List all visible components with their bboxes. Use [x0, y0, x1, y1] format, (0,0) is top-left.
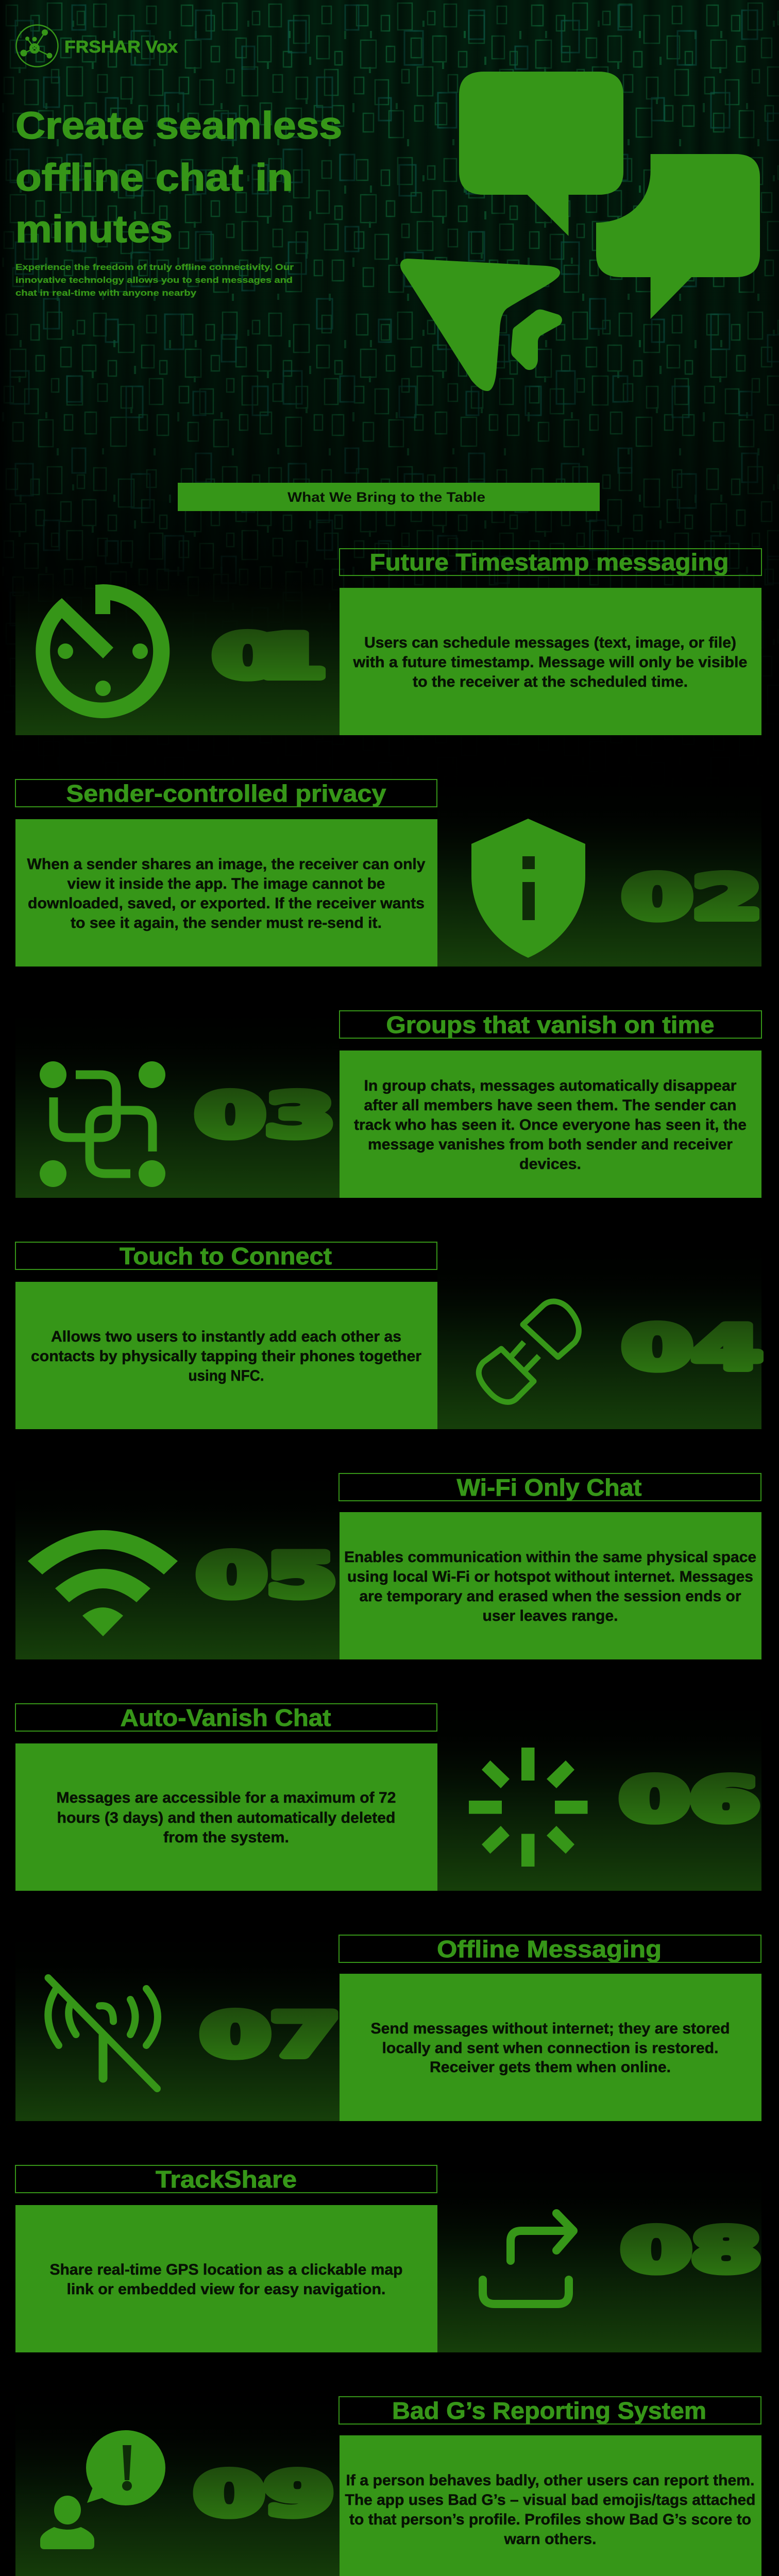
feature 02: sender-controlled privacy — [15, 779, 762, 967]
text panel 05: are temporary and erased when the session ends or — [360, 1588, 741, 1605]
section banner: What We Bring to the Table — [287, 489, 485, 505]
hero paragraph: innovative technology allows you to send messages and — [15, 275, 293, 285]
title box 01: Future Timestamp messaging — [370, 549, 729, 575]
text panel 07: Receiver gets them when online. — [430, 2059, 671, 2076]
feature 07: offline messaging — [15, 1935, 761, 2121]
icon: broken link — [479, 1301, 579, 1402]
icon: no signal — [48, 1978, 158, 2089]
hero heading: Create seamless — [15, 104, 342, 147]
icon: person reporting — [40, 2430, 165, 2549]
logo — [16, 25, 58, 67]
text panel 09: to that person’s profile. Profiles show Bad G’s score to — [349, 2511, 751, 2528]
section banner — [178, 483, 600, 511]
title box 02 — [15, 779, 437, 807]
text panel 07: locally and sent when connection is restored. — [382, 2040, 718, 2057]
brand name: FRSHAR Vox — [64, 37, 178, 56]
text panel 05: using local Wi-Fi or hotspot without internet. Messages — [347, 1568, 753, 1585]
number 07: 07 — [200, 2000, 340, 2070]
title box 08 — [15, 2165, 437, 2193]
text panel 06: from the system. — [163, 1829, 289, 1846]
number 04: 04 — [622, 1313, 762, 1382]
text panel 06 — [15, 1743, 437, 1891]
title box 04 — [15, 1242, 437, 1269]
panel: gradient 04 — [437, 1242, 761, 1429]
text panel 01: Users can schedule messages (text, image, or file) — [364, 634, 736, 651]
hero paragraph: Experience the freedom of truly offline connectivity. Our — [15, 262, 294, 272]
text panel 06: hours (3 days) and then automatically deleted — [57, 1809, 396, 1826]
text panel 08: Share real-time GPS location as a clickable map — [49, 2261, 403, 2278]
title box 07 — [339, 1935, 761, 1962]
text panel 04: contacts by physically tapping their phones together — [31, 1348, 421, 1365]
number 09: 09 — [194, 2459, 334, 2529]
feature 08: trackshare — [15, 2165, 761, 2352]
text panel 03 — [340, 1050, 761, 1198]
text panel 01 — [340, 588, 761, 735]
title box 07: Offline Messaging — [437, 1936, 662, 1962]
title box 04: Touch to Connect — [120, 1243, 332, 1269]
number 02: 02 — [622, 862, 762, 932]
hero paragraph — [15, 262, 294, 298]
title box 09: Bad G’s Reporting System — [392, 2397, 706, 2424]
text panel 08 — [15, 2205, 437, 2352]
hero heading: minutes — [15, 208, 173, 250]
text panel 03: In group chats, messages automatically disappear — [364, 1077, 737, 1094]
panel: gradient 03 — [15, 1011, 340, 1198]
text panel 07 — [340, 1974, 761, 2121]
title box 06 — [15, 1704, 437, 1731]
panel: gradient 02 — [437, 779, 761, 967]
text panel 02 — [15, 819, 437, 967]
text panel 02: view it inside the app. The image cannot be — [67, 875, 385, 892]
text panel 03: devices. — [519, 1156, 581, 1173]
text panel 05: Enables communication within the same physical space — [344, 1549, 756, 1566]
title box 03: Groups that vanish on time — [386, 1011, 714, 1038]
title box 05 — [339, 1473, 761, 1501]
text panel 03: track who has seen it. Once everyone has seen it, the — [354, 1116, 747, 1133]
icon: loading spinner — [469, 1748, 587, 1867]
title box 06: Auto-Vanish Chat — [121, 1704, 331, 1731]
text panel 09: If a person behaves badly, other users can report them. — [346, 2472, 754, 2489]
hero paragraph: chat in real-time with anyone nearby — [15, 288, 197, 298]
text panel 06: Messages are accessible for a maximum of 72 — [57, 1789, 396, 1806]
feature 03: groups that vanish on time — [15, 1011, 761, 1198]
icon: clock — [36, 584, 170, 718]
text panel 04: Allows two users to instantly add each other as — [51, 1328, 401, 1345]
feature 09: bad g's reporting system — [15, 2397, 761, 2576]
text panel 09 — [340, 2435, 761, 2576]
title box 09 — [339, 2397, 761, 2424]
number 06: 06 — [620, 1765, 759, 1834]
text panel 05 — [340, 1512, 761, 1659]
text panel 02: downloaded, saved, or exported. If the receiver wants — [28, 895, 425, 912]
panel: gradient 06 — [437, 1704, 761, 1891]
text panel 01: with a future timestamp. Message will only be visible — [352, 654, 747, 671]
icon: chat bubbles and paper plane — [400, 72, 760, 391]
background: digital rain top — [0, 0, 779, 804]
text panel 09: warn others. — [503, 2531, 597, 2548]
icon: linked group nodes — [40, 1061, 165, 1187]
hero heading: offline chat in — [15, 156, 293, 199]
icon: share arrow — [483, 2213, 573, 2304]
feature 06: auto-vanish chat — [15, 1704, 761, 1891]
panel: gradient 07 — [15, 1935, 340, 2121]
hero heading — [15, 104, 342, 250]
number 03: 03 — [195, 1080, 335, 1150]
number 05: 05 — [197, 1540, 336, 1610]
text panel 05: user leaves range. — [482, 1607, 618, 1624]
text panel 08: link or embedded view for easy navigation. — [67, 2281, 385, 2298]
text panel 03: message vanishes from both sender and receiver — [368, 1136, 733, 1153]
icon: shield — [471, 819, 585, 958]
text panel 04: using NFC. — [189, 1367, 264, 1384]
number 08: 08 — [621, 2215, 761, 2285]
feature 04: touch to connect — [15, 1242, 762, 1429]
panel: gradient 09 — [15, 2397, 340, 2576]
panel: gradient 01 — [15, 548, 340, 735]
number 01: 01 — [213, 621, 327, 691]
title box 02: Sender-controlled privacy — [66, 780, 386, 807]
text panel 09: The app uses Bad G’s – visual bad emojis/tags attached — [345, 2492, 755, 2509]
text panel 02: When a sender shares an image, the receiver can only — [27, 856, 426, 873]
text panel 01: to the receiver at the scheduled time. — [413, 673, 688, 690]
icon: wi-fi — [28, 1530, 178, 1636]
text panel 07: Send messages without internet; they are stored — [371, 2020, 730, 2037]
title box 05: Wi-Fi Only Chat — [456, 1474, 642, 1501]
text panel 03: after all members have seen them. The sender can — [364, 1097, 737, 1114]
title box 08: TrackShare — [156, 2166, 297, 2193]
feature 05: wi-fi only chat — [15, 1473, 761, 1659]
panel: gradient 05 — [15, 1473, 340, 1659]
panel: gradient 08 — [437, 2165, 761, 2352]
text panel 02: to see it again, the sender must re-send it. — [71, 914, 382, 931]
text panel 04 — [15, 1282, 437, 1429]
feature 01: future timestamp messaging — [15, 548, 761, 735]
